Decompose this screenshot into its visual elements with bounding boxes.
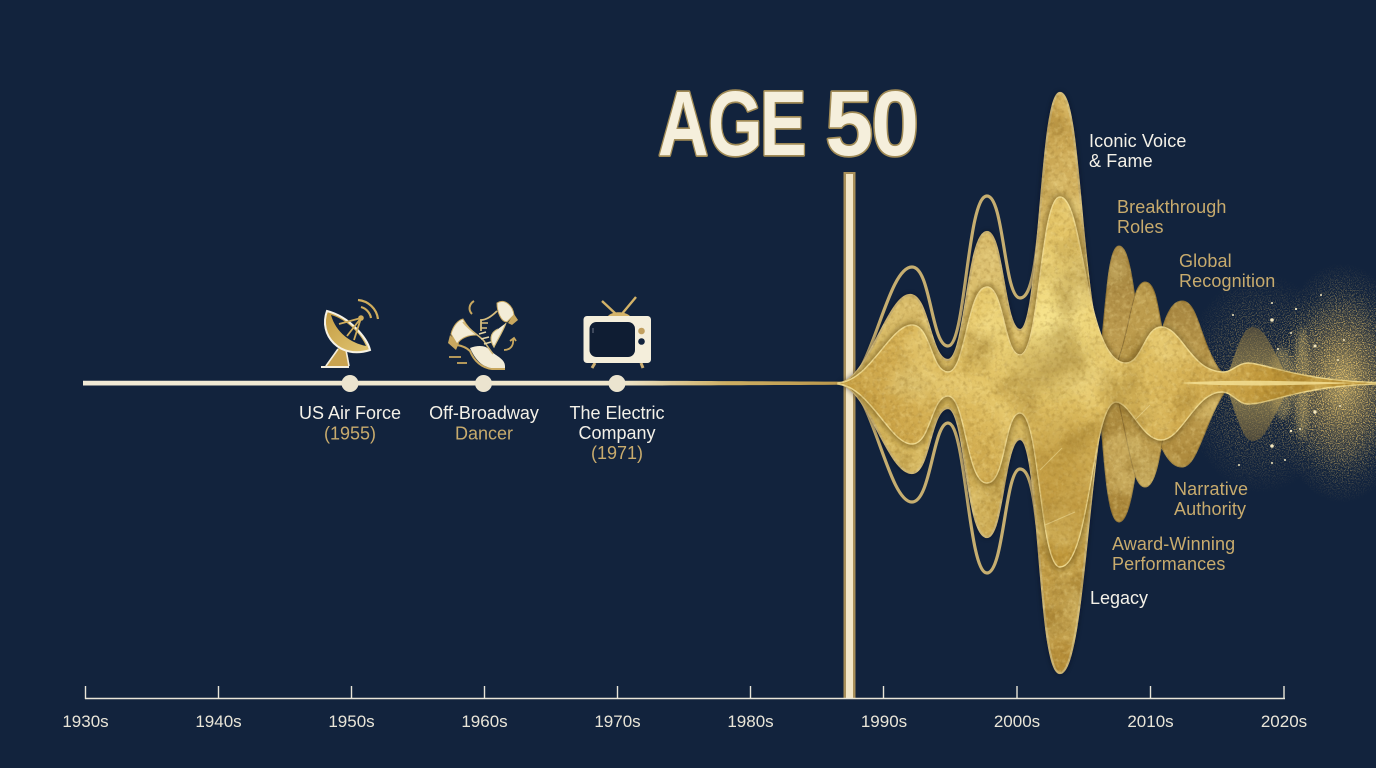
gold dust cloud	[1182, 263, 1376, 503]
milestone label: US Air Force: US Air Force	[299, 403, 401, 423]
wave label: Breakthrough Roles: Breakthrough	[1117, 197, 1227, 217]
wave outline ring	[845, 196, 1042, 573]
infographic canvas	[64, 89, 1376, 727]
wave label: Iconic Voice and Fame: Iconic Voice	[1089, 131, 1186, 151]
milestone label: The Electric Company: (1971)	[591, 443, 643, 463]
right wave: middle peak	[1118, 282, 1172, 487]
wave label: Global Recognition: Global	[1179, 251, 1232, 271]
main wave: back layer with tall peak	[840, 93, 1110, 673]
decade axis: 2020s	[1261, 712, 1307, 731]
wave label: Iconic Voice and Fame: & Fame	[1089, 151, 1153, 171]
decade axis: 2010s	[1127, 712, 1174, 731]
foil dark patch	[1014, 341, 1150, 550]
decade axis: 1990s	[861, 712, 907, 731]
right wave: peak behind breakthrough roles	[1098, 246, 1146, 522]
right wave: global recognition layer	[1148, 301, 1226, 467]
milestone label: The Electric Company: The Electric	[569, 403, 665, 423]
decade axis: 1930s	[62, 712, 109, 731]
milestone icon: satellite dish	[321, 300, 378, 367]
title: Age 50: AGE	[658, 73, 806, 175]
back layer shading under front layer	[849, 191, 1096, 572]
wave label: Award-Winning Performances: Performances	[1112, 554, 1225, 574]
age 50 vertical marker	[844, 172, 856, 698]
title: Age 50: 50	[826, 72, 919, 175]
decade axis: 1980s	[727, 712, 774, 731]
title: Age 50	[658, 72, 919, 175]
right layers shading under front layer	[1102, 322, 1224, 445]
decade axis: 1970s	[594, 712, 641, 731]
wave label: Global Recognition: Recognition	[1179, 271, 1275, 291]
milestone icon: television	[584, 297, 651, 368]
wave label: Legacy: Legacy	[1090, 588, 1148, 608]
wave label: Narrative Authority: Narrative	[1174, 479, 1248, 499]
milestone icon: dancing shoes	[448, 301, 518, 369]
wave label: Narrative Authority: Authority	[1174, 499, 1246, 519]
decade axis	[62, 686, 1307, 731]
milestone label: Off-Broadway Dancer: Dancer	[455, 424, 513, 444]
wave label: Breakthrough Roles: Roles	[1117, 217, 1164, 237]
milestone dots	[342, 375, 626, 392]
main wave: front layer	[838, 197, 1376, 567]
milestone label: The Electric Company: Company	[578, 423, 656, 443]
milestone label: US Air Force: (1955)	[324, 424, 376, 444]
faint tail wave	[1225, 327, 1292, 441]
decade axis: 1940s	[195, 712, 242, 731]
wave label: Award-Winning Performances: Award-Winning	[1112, 534, 1235, 554]
decade axis: 2000s	[994, 712, 1040, 731]
tail highlight	[1180, 381, 1360, 385]
decade axis: 1950s	[328, 712, 375, 731]
timeline line	[83, 381, 860, 386]
decade axis: 1960s	[461, 712, 508, 731]
wave shadow	[840, 93, 1110, 673]
milestone label: Off-Broadway Dancer: Off-Broadway	[429, 403, 539, 423]
